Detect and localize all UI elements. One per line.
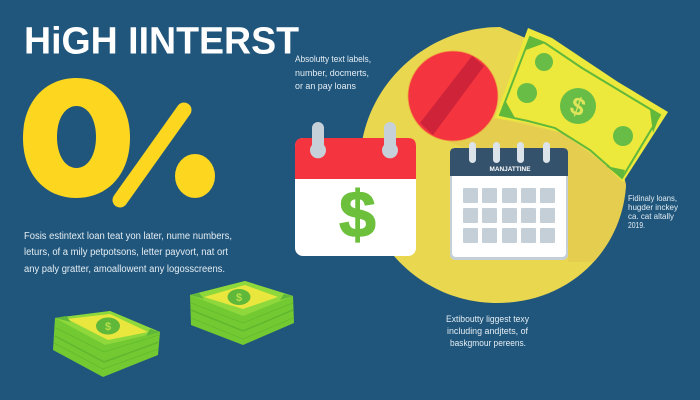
text block: right note: hugder inckey xyxy=(628,202,679,212)
calendar ring left xyxy=(310,122,326,158)
text block: right note: ca. cat altally xyxy=(628,211,675,221)
yellow background circle xyxy=(360,27,626,303)
text block: right note: Fidinaly loans, xyxy=(628,193,677,203)
calendar ring right xyxy=(382,122,398,158)
icon: dollar bill xyxy=(495,28,668,182)
text block: left paragraph: Fosis estintext loan teat yon later, nume numbers, xyxy=(24,231,232,242)
text block: bottom note xyxy=(446,314,529,348)
text block: top note: or an pay loans xyxy=(295,81,356,91)
icon: money stack left: $ xyxy=(105,321,111,333)
text block: right note: 2019. xyxy=(628,220,645,230)
text block: left paragraph: leturs, of a mily petpotsons, letter payvort, nat ort xyxy=(24,247,228,258)
text block: left paragraph xyxy=(24,231,232,275)
icon: money stack right xyxy=(190,281,294,345)
icon: red calendar with dollar xyxy=(295,122,416,256)
icon: money stack left xyxy=(53,311,160,377)
big percent sign xyxy=(23,78,215,200)
text block: bottom note: including andjtets, of xyxy=(447,326,528,336)
icon: money stack right: $ xyxy=(236,292,242,304)
text block: top note: Absolutty text labels, xyxy=(295,54,371,64)
text block: top note xyxy=(295,54,371,91)
icon: monthly calendar xyxy=(450,142,568,260)
text block: left paragraph: any paly gratter, amoallowent any logosscreens. xyxy=(24,264,225,275)
icon: dollar bill: $ xyxy=(566,91,589,123)
icon: red prohibition circle xyxy=(408,51,498,141)
text block: bottom note: Extiboutty liggest texy xyxy=(446,314,529,324)
calendar day grid xyxy=(463,188,555,243)
dollar sign: $ xyxy=(339,177,376,251)
text block: right note xyxy=(628,193,679,230)
text block: top note: number, docmerts, xyxy=(295,68,369,78)
calendar month label: MANJATTINE xyxy=(490,166,531,173)
title: HiGH IINTERST xyxy=(24,20,299,62)
text block: bottom note: baskgmour pereens. xyxy=(450,338,526,348)
shaded area of the circle under the bill xyxy=(450,118,626,262)
